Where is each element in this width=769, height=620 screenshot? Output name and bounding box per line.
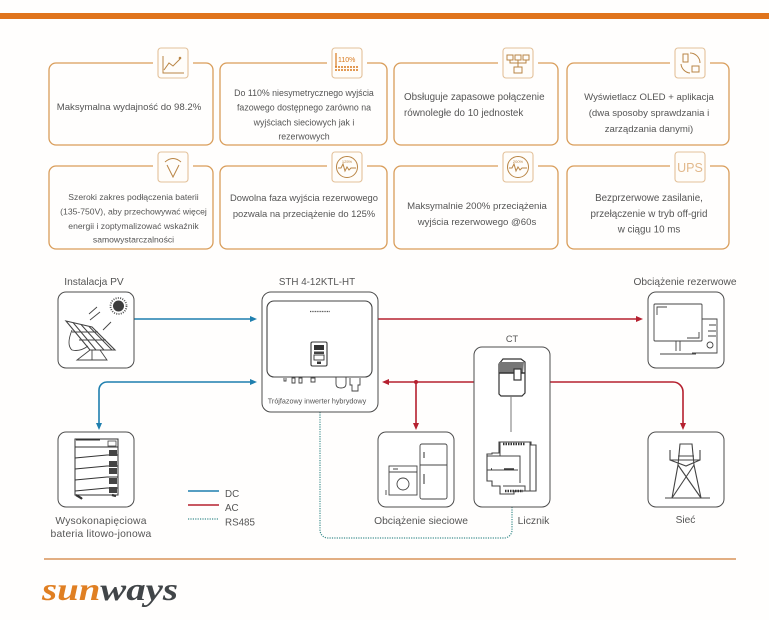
icon: energy meter (487, 442, 536, 494)
text: parallel: równoległe do 10 jednostek (404, 108, 523, 119)
text: UPS: przełączenie w tryb off-grid (591, 209, 707, 220)
arrow: CT to grid AC (550, 382, 686, 430)
icon: 110 percent (332, 48, 362, 78)
label: PV: Instalacja PV (64, 277, 124, 288)
legend (188, 489, 256, 528)
legend: RS485 (225, 518, 256, 528)
panel: inverter (262, 277, 378, 412)
text: UPS: Bezprzerwowe zasilanie, (595, 193, 703, 204)
text: efficiency: Maksymalna wydajność do 98.2% (57, 102, 202, 113)
icon: current transformer (499, 359, 525, 432)
panel: feature 200 overload (394, 152, 558, 249)
icon: UPS: UPS (677, 161, 703, 175)
panel: feature display (567, 48, 729, 145)
label: grid load: Obciążenie sieciowe (374, 516, 468, 527)
icon: wide range (158, 152, 188, 182)
panel: feature unbalanced output (220, 48, 387, 145)
label: backup load: Obciążenie rezerwowe (633, 277, 737, 288)
panel: feature 125 overload (220, 152, 387, 249)
icon: pylon (665, 444, 710, 498)
top orange bar (0, 13, 769, 19)
icon: overload 125: 125% (342, 159, 353, 164)
label: grid: Sieć (676, 515, 695, 526)
icon: UPS (675, 152, 705, 182)
bottom divider (44, 558, 736, 560)
label: inverter model: STH 4-12KTL-HT (279, 277, 355, 288)
panel: feature efficiency (49, 48, 213, 145)
icon: overload 200: 200% (513, 159, 524, 164)
text: UPS: w ciągu 10 ms (617, 224, 680, 236)
text: overload 200: wyjścia rezerwowego @60s (417, 217, 536, 228)
icon: efficiency chart (158, 48, 188, 78)
text: unbalanced output: fazowego dostępnego zarówno na (237, 103, 371, 113)
panel: PV installation (58, 277, 134, 368)
icon: solar panel (66, 307, 115, 360)
text: battery range: samowystarczalności (93, 234, 174, 244)
icon: computer (654, 304, 717, 354)
text: unbalanced output: Do 110% niesymetrycznego wyjścia (234, 88, 374, 98)
panel: feature UPS (567, 152, 729, 249)
icon: 110 percent: 110% (338, 57, 355, 64)
label: battery: Wysokonapięciowa (55, 516, 147, 527)
text: display: Wyświetlacz OLED + aplikacja (584, 92, 714, 103)
icon: display and app (675, 48, 705, 78)
text: battery range: (135-750V), aby przechowywać więcej (60, 206, 207, 216)
text: overload 125: Dowolna faza wyjścia rezerwowego (230, 192, 378, 203)
text: battery range: energii i zoptymalizować wskaźnik (68, 221, 199, 231)
panel: grid (648, 432, 724, 526)
icon: overload 125 (332, 152, 362, 182)
icon: parallel units (503, 48, 533, 78)
panel: CT and meter (474, 334, 550, 527)
panel: battery (51, 432, 152, 540)
text: battery range: Szeroki zakres podłączenia baterii (68, 192, 199, 202)
label: meter: Licznik (518, 516, 550, 527)
text: parallel: Obsługuje zapasowe połączenie (404, 92, 545, 103)
arrow: CT to inverter and grid load AC (382, 379, 474, 430)
label: CT: CT (506, 334, 519, 344)
legend: AC (225, 503, 239, 514)
icon: inverter body (267, 301, 372, 391)
panel: feature parallel (394, 48, 558, 145)
icon: sun (110, 298, 126, 314)
icon: fridge and washer (386, 444, 447, 499)
icon: battery stack (75, 439, 118, 499)
panel: grid load (374, 432, 468, 527)
panel: feature battery range (49, 152, 213, 249)
text: unbalanced output: rezerwowych (278, 132, 330, 142)
text: overload 200: Maksymalnie 200% przeciążenia (407, 201, 547, 212)
label: battery: bateria litowo-jonowa (51, 529, 152, 540)
arrow: battery DC link (96, 379, 257, 430)
text: overload 125: pozwala na przeciążenie do 125% (233, 208, 375, 219)
arrow: RS485 dotted link (320, 412, 512, 538)
text: display: (dwa sposoby sprawdzania i (589, 108, 709, 119)
arrow: inverter to backup load AC (378, 316, 643, 322)
icon: overload 200 (503, 152, 533, 182)
panel: backup load (633, 277, 737, 368)
text: unbalanced output: wyjściach sieciowych jak i (253, 117, 354, 127)
legend: DC (225, 489, 239, 500)
arrow: PV to inverter DC (134, 316, 257, 322)
text: display: zarządzania danymi) (605, 124, 693, 135)
logo: sunways: sun ways (41, 571, 178, 607)
label: inverter type: Trójfazowy inwerter hybrydowy (268, 396, 367, 406)
